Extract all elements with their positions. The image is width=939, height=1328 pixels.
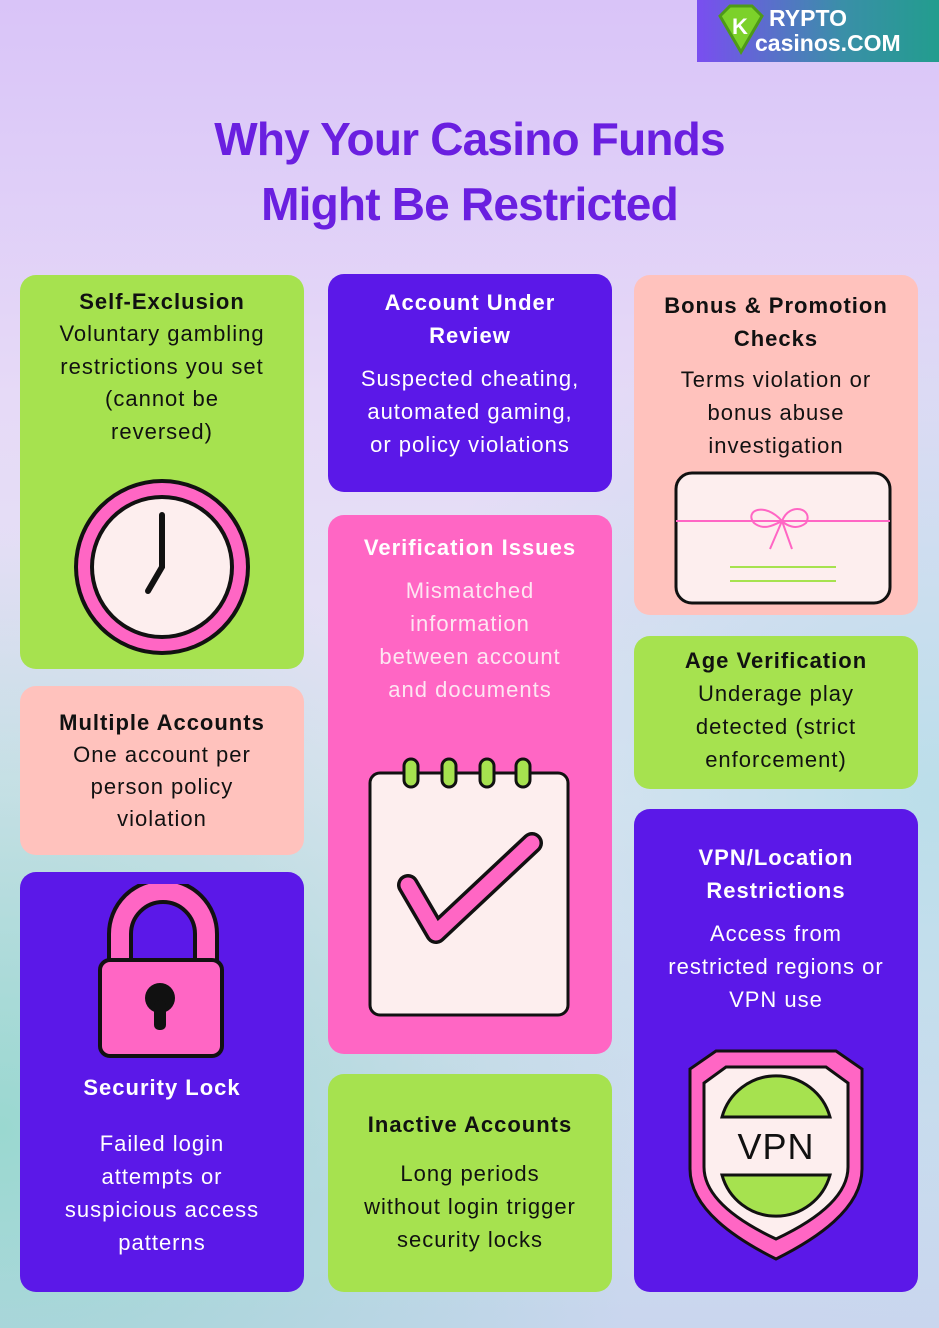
panel: bonus: Terms violation or — [681, 367, 871, 392]
logo: casinos.COM — [755, 30, 901, 56]
panel: multiple accounts: One account per — [73, 742, 251, 767]
panel: inactive: Long periods — [400, 1161, 540, 1186]
panel: inactive: Inactive Accounts — [368, 1112, 572, 1137]
panel: account under review: automated gaming, — [367, 399, 573, 424]
panel: verification: Verification Issues — [364, 535, 576, 560]
panel: vpn: restricted regions or — [668, 954, 884, 979]
panel: security lock — [20, 872, 304, 1292]
panel: inactive: without login trigger — [364, 1194, 576, 1219]
icon: vpn shield: VPN — [737, 1126, 815, 1167]
panel: vpn: Restrictions — [706, 878, 846, 903]
panel: verification: Mismatched — [406, 578, 534, 603]
panel: inactive: security locks — [397, 1227, 543, 1252]
icon: notepad check — [368, 758, 570, 1016]
panel: self-exclusion: restrictions you set — [60, 354, 264, 378]
panel: self-exclusion: (cannot be — [105, 386, 219, 411]
logo: RYPTO — [769, 5, 847, 31]
panel: age verification: detected (strict — [696, 714, 856, 739]
panel: vpn: VPN/Location — [698, 845, 854, 870]
panel: security lock: attempts or — [101, 1164, 223, 1189]
panel: multiple accounts — [20, 686, 304, 855]
panel: account under review: Review — [429, 323, 511, 348]
panel: age verification — [634, 636, 918, 789]
text: Might Be Restricted — [261, 178, 678, 230]
panel: account under review — [328, 274, 612, 492]
panel: age verification: Age Verification — [685, 648, 867, 673]
panel: security lock: patterns — [118, 1230, 206, 1255]
panel: security lock: Failed login — [100, 1131, 224, 1156]
panel: verification: and documents — [388, 677, 552, 702]
panel: age verification: enforcement) — [705, 747, 847, 772]
icon: clock — [74, 479, 250, 655]
panel: bonus: Bonus & Promotion — [664, 293, 888, 318]
icon: vpn shield — [688, 1050, 864, 1261]
text: Why Your Casino Funds — [214, 113, 725, 165]
panel: self-exclusion: Voluntary gambling — [59, 321, 265, 346]
logo — [697, 0, 939, 62]
panel: bonus: investigation — [708, 433, 844, 458]
icon: gift card — [674, 472, 892, 604]
panel: vpn: Access from — [710, 921, 842, 946]
panel: inactive — [328, 1074, 612, 1292]
panel: bonus: bonus abuse — [708, 400, 844, 425]
panel: multiple accounts: Multiple Accounts — [59, 710, 265, 735]
panel: self-exclusion: Self-Exclusion — [79, 289, 245, 314]
panel: account under review: Suspected cheating, — [361, 366, 579, 391]
title — [214, 113, 725, 230]
icon: padlock — [98, 884, 224, 1058]
panel: verification: information — [410, 611, 530, 636]
panel: verification: between account — [379, 644, 561, 669]
panel: age verification: Underage play — [698, 681, 854, 706]
panel: self-exclusion: reversed) — [111, 418, 213, 444]
panel: security lock: suspicious access — [65, 1197, 259, 1222]
panel: vpn: VPN use — [729, 987, 823, 1012]
panel: multiple accounts: violation — [117, 806, 207, 831]
panel: bonus: Checks — [734, 326, 818, 351]
panel: self-exclusion — [20, 275, 304, 669]
panel: verification — [328, 515, 612, 1054]
panel: bonus — [634, 275, 918, 615]
logo: K — [732, 14, 748, 39]
panel: account under review: Account Under — [385, 290, 555, 315]
panel: vpn — [634, 809, 918, 1292]
panel: multiple accounts: person policy — [91, 774, 233, 799]
panel: security lock: Security Lock — [83, 1075, 241, 1100]
panel: account under review: or policy violations — [370, 432, 570, 457]
